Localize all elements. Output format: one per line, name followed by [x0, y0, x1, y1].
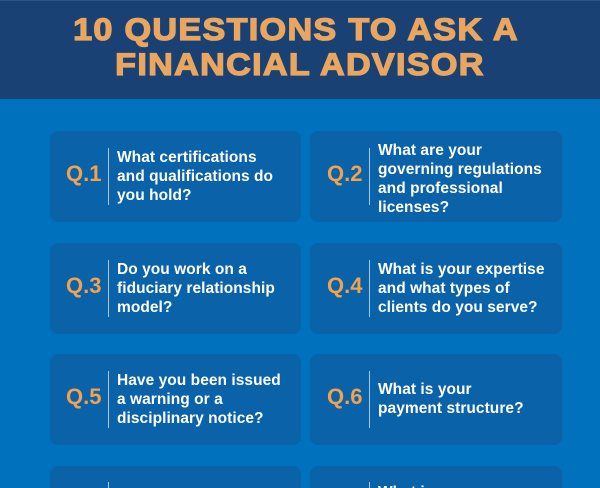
- label Q.4: Q.4: [327, 273, 362, 298]
- question 6 text: What is your: [378, 381, 472, 398]
- question 1 text: What certifications: [117, 149, 257, 166]
- question 2 text: licenses?: [378, 199, 449, 216]
- panel: question 7, cropped: [50, 466, 301, 488]
- question 4 text: What is your expertise: [378, 261, 544, 278]
- panel: question 6: [310, 354, 562, 445]
- label Q.5: Q.5: [66, 384, 101, 409]
- label Q.3: Q.3: [66, 273, 101, 298]
- label Q.6: Q.6: [327, 384, 362, 409]
- question 1 text: and qualifications do: [117, 168, 273, 185]
- question 5 text: disciplinary notice?: [117, 410, 264, 427]
- title line 2: FINANCIAL ADVISOR: [115, 46, 485, 82]
- label Q.1: Q.1: [66, 161, 101, 186]
- question 3 text: fiduciary relationship: [117, 280, 275, 297]
- question 1 text: you hold?: [117, 187, 192, 204]
- question 4 text: clients do you serve?: [378, 299, 538, 316]
- panel: question 3: [50, 243, 301, 334]
- question 4 text: [378, 261, 544, 316]
- panel: question 5: [50, 354, 301, 445]
- panel: question 4: [310, 243, 562, 334]
- question 6 text: [378, 381, 524, 417]
- question 3 text: model?: [117, 299, 172, 316]
- question 3 text: [117, 261, 275, 316]
- question 4 text: and what types of: [378, 280, 510, 297]
- question 6 text: payment structure?: [378, 400, 524, 417]
- panel: question 2: [310, 131, 562, 222]
- label Q.2: Q.2: [327, 161, 362, 186]
- panel: question 8, cropped: [310, 466, 562, 488]
- question 2 text: What are your: [378, 142, 482, 159]
- question 2 text: [378, 142, 542, 216]
- question 5 text: [117, 372, 281, 427]
- question 5 text: Have you been issued: [117, 372, 281, 389]
- question 2 text: governing regulations: [378, 161, 542, 178]
- question 5 text: a warning or a: [117, 391, 223, 408]
- header band: [0, 0, 600, 99]
- question 3 text: Do you work on a: [117, 261, 247, 278]
- question 2 text: and professional: [378, 180, 503, 197]
- question 1 text: [117, 149, 273, 204]
- title line 1: 10 QUESTIONS TO ASK A: [73, 11, 519, 47]
- panel: question 1: [50, 131, 301, 222]
